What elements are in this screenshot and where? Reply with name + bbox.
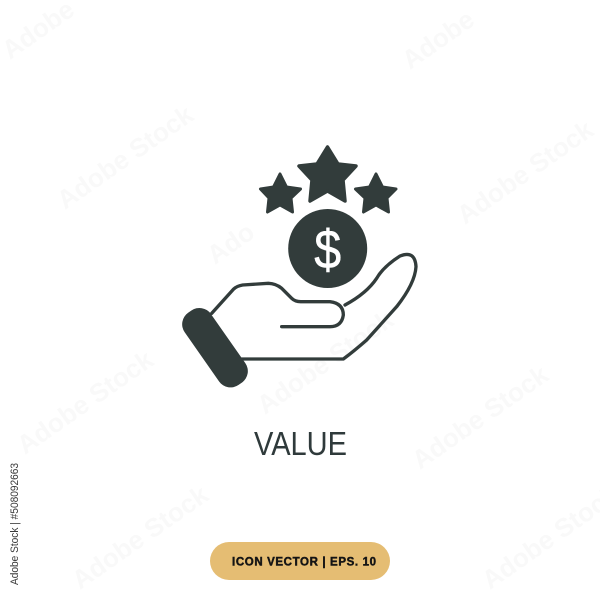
watermark pattern: Adobe [396, 4, 480, 75]
icon: open hand outline [212, 254, 416, 359]
watermark pattern: Adobe Stock [66, 479, 214, 595]
watermark pattern: Adobe Stock [406, 359, 554, 475]
badge: icon vector: ICON VECTOR | EPS. 10 [232, 556, 376, 568]
watermark pattern: Adobe Stock [51, 99, 199, 215]
icon: dollar coin [288, 209, 367, 288]
watermark pattern: Adobe Stock [251, 304, 399, 420]
icon: sleeve cuff [177, 302, 253, 393]
icon: hand holding coin with stars [177, 147, 416, 393]
title: VALUE [254, 425, 347, 462]
watermark pattern: Ado [201, 216, 260, 270]
badge: icon vector [210, 542, 390, 580]
stock id side label: Adobe Stock | #508092663 [9, 463, 21, 585]
icon: large centre star [299, 147, 356, 201]
watermark pattern: Adobe Stock [11, 344, 159, 460]
icon: left star [260, 174, 300, 212]
watermark pattern: Adobe Stock [451, 114, 599, 230]
icon: dollar coin: $ [314, 219, 341, 280]
icon: right star [356, 174, 396, 212]
